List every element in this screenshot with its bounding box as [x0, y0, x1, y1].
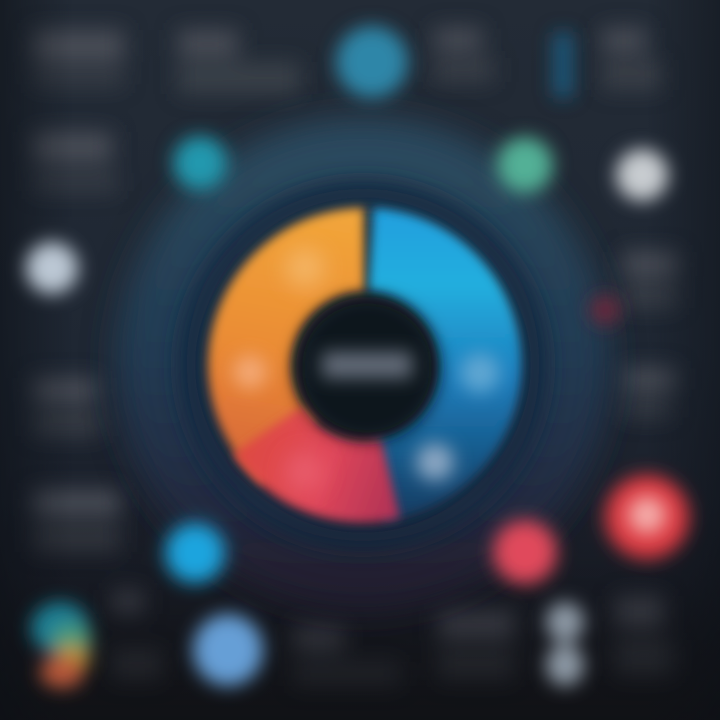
outer ring [158, 160, 568, 570]
donut highlight: red [285, 452, 325, 492]
centre label [322, 352, 412, 378]
top teal circle [336, 26, 408, 98]
light blue circle bottom [193, 614, 263, 686]
badge inner highlight [628, 496, 666, 534]
dark red dot [590, 295, 620, 325]
dark band around donut [191, 193, 535, 537]
green circle [497, 137, 553, 193]
donut centre [296, 297, 438, 439]
white stacked dots [546, 602, 584, 686]
donut marker: blue right [460, 353, 500, 393]
red circle lower [493, 520, 557, 584]
orange segment [250, 250, 364, 452]
small multicolour pie [31, 602, 92, 688]
blue segment [371, 250, 479, 479]
large red badge [605, 475, 689, 559]
donut marker: blue lower [416, 443, 454, 481]
donut marker: orange left [233, 355, 267, 389]
donut marker: orange top [285, 248, 325, 288]
white circle left [26, 242, 78, 294]
red segment [268, 430, 390, 480]
donut chart [233, 248, 500, 492]
teal circle [173, 136, 227, 190]
blue circle lower left [165, 523, 225, 583]
white circle right [616, 149, 668, 201]
top vertical bar [553, 32, 573, 98]
